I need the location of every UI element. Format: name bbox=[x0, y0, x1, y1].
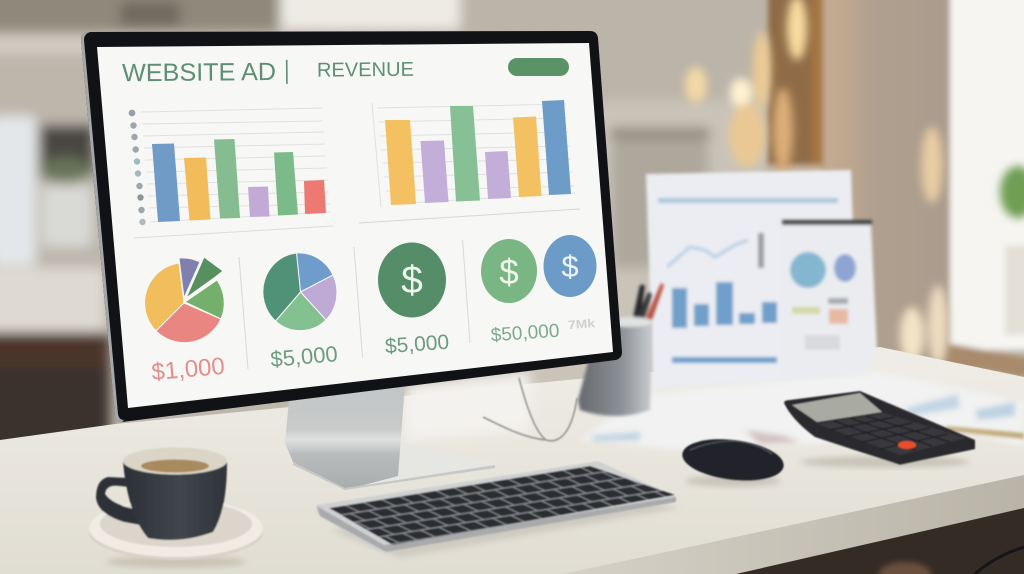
calculator keys bbox=[818, 413, 966, 455]
sheet circles bbox=[790, 252, 826, 288]
cup body bbox=[123, 462, 227, 540]
report marker bbox=[758, 233, 764, 268]
screen divider 2 bbox=[354, 247, 362, 357]
curtains and window bbox=[685, 0, 1024, 378]
keyboard bbox=[316, 461, 680, 558]
cup rim bbox=[123, 448, 227, 474]
dollar coin: dark green: $ bbox=[401, 259, 423, 302]
monitor bezel bbox=[81, 31, 622, 422]
base edge highlight bbox=[293, 462, 495, 490]
left chart grid lines bbox=[141, 108, 331, 222]
garbled small label: 7Mk bbox=[568, 316, 596, 332]
cable bbox=[483, 378, 577, 441]
right bar chart bbox=[372, 100, 575, 207]
value label: $5,000: $5,000 bbox=[384, 331, 450, 358]
cup handle bbox=[96, 477, 146, 526]
screen divider 3 bbox=[463, 240, 470, 343]
calculator screen bbox=[792, 393, 882, 422]
papers on desk bbox=[580, 372, 1024, 450]
sheet mini bars bbox=[792, 307, 820, 314]
report sheet behind monitor bbox=[646, 170, 858, 387]
dollar coin: dark green bbox=[378, 242, 446, 318]
pie chart 1 bbox=[145, 257, 224, 343]
dollar coin: green bbox=[481, 239, 537, 303]
left chart bars bbox=[152, 144, 180, 222]
screen divider 1 bbox=[239, 257, 248, 369]
right chart bars bbox=[385, 120, 416, 205]
value label: $1,000: $1,000 bbox=[150, 353, 226, 386]
notebook edge bbox=[945, 426, 1024, 439]
monitor stand bbox=[285, 385, 495, 490]
mouse bbox=[680, 434, 786, 487]
dollar coin: green: $ bbox=[499, 253, 519, 292]
pie chart 2 bbox=[263, 253, 337, 331]
left chart divider bbox=[134, 226, 333, 238]
report line chart bbox=[667, 240, 748, 267]
stand neck bbox=[285, 385, 405, 490]
heading: website ad revenue bbox=[122, 57, 414, 87]
monitor screen bbox=[97, 43, 613, 408]
right chart grid lines bbox=[372, 103, 575, 207]
report heading bar bbox=[658, 198, 838, 203]
monitor bbox=[81, 31, 622, 422]
desk top bbox=[0, 347, 1024, 574]
coffee cup and saucer bbox=[89, 448, 263, 568]
value label: $50,000: $50,000 bbox=[490, 321, 560, 346]
left bar chart bbox=[129, 108, 331, 225]
keyboard chassis bbox=[316, 461, 676, 552]
status pill bbox=[508, 58, 569, 76]
heading: website ad revenue: REVENUE bbox=[317, 59, 414, 82]
value label: $5,000: $5,000 bbox=[269, 341, 339, 372]
clip bbox=[782, 220, 872, 225]
keyboard keys bbox=[329, 466, 675, 545]
dollar coin: blue: $ bbox=[561, 249, 579, 284]
report footer bar bbox=[672, 357, 777, 363]
desk surface bbox=[0, 347, 1024, 574]
saucer bbox=[106, 556, 246, 568]
stand base bright bbox=[345, 442, 495, 490]
second report sheet with clip bbox=[780, 220, 877, 380]
coffee bbox=[141, 460, 209, 472]
report bar chart bbox=[672, 282, 777, 328]
desk front face bbox=[564, 475, 1024, 574]
pencil cup bbox=[578, 283, 664, 416]
left chart dots bbox=[129, 110, 146, 225]
calculator bbox=[784, 391, 975, 468]
heading: website ad revenue: WEBSITE AD bbox=[122, 58, 276, 87]
calculator red key bbox=[898, 441, 916, 449]
dollar coin: blue bbox=[544, 235, 596, 297]
under-desk shadow bbox=[700, 500, 1024, 574]
right chart divider bbox=[359, 209, 580, 223]
